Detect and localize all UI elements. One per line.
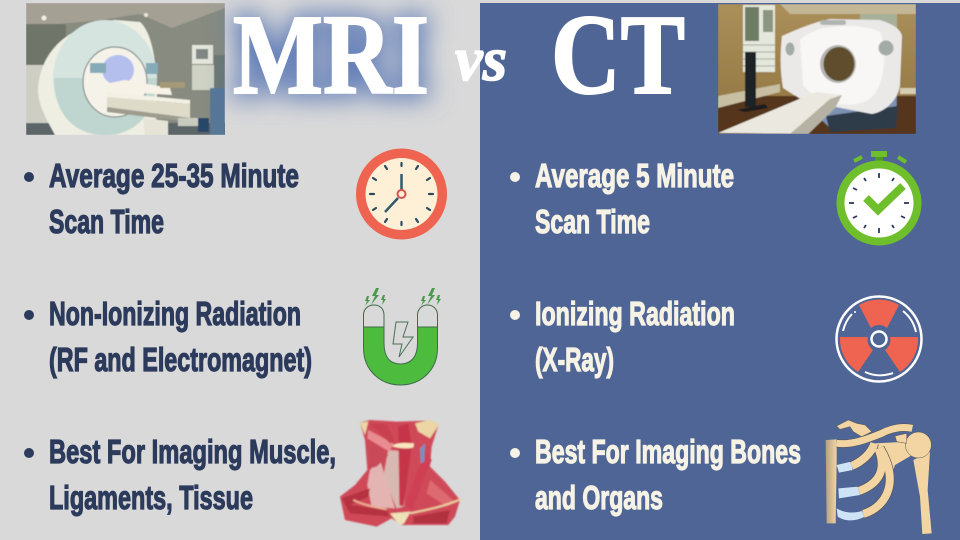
bullet: best for imaging: Best For Imaging Muscle, [49,433,336,470]
bullet: radiation: (X-Ray) [535,341,614,378]
bullet: best for imaging: and Organs [535,479,663,516]
bullet: scan time: Average 25-35 Minute [49,157,299,194]
bullet: scan time [510,157,734,240]
icon: neck muscles [340,420,461,527]
bullet: radiation: (RF and Electromagnet) [49,341,312,378]
bullet: scan time: Scan Time [535,203,650,240]
bullet: best for imaging: Ligaments, Tissue [49,479,253,516]
bullet: radiation: Ionizing Radiation [535,295,735,332]
bullet: best for imaging: Best For Imaging Bones [535,433,801,470]
title word: vs: vs [455,26,507,94]
icon: wall clock [356,148,447,240]
bullet: scan time [24,157,299,240]
bullet: best for imaging [510,433,801,516]
bullet: best for imaging [24,433,336,516]
icon: horseshoe magnet [364,288,441,385]
panel: CT [480,3,960,540]
bullet: radiation [24,295,312,378]
bullet: scan time: Average 5 Minute [535,157,734,194]
icon: shoulder and rib bones [826,420,932,534]
title: MRI vs CT [232,0,685,119]
photo: MRI scanner [26,3,226,136]
photo: CT scanner [718,4,916,134]
bullet: radiation [510,295,735,378]
bullet: scan time: Scan Time [49,203,164,240]
panel: MRI [24,3,462,528]
bullet: radiation: Non-Ionizing Radiation [49,295,301,332]
icon: radiation symbol [836,296,922,382]
icon: stopwatch with check [836,151,922,246]
